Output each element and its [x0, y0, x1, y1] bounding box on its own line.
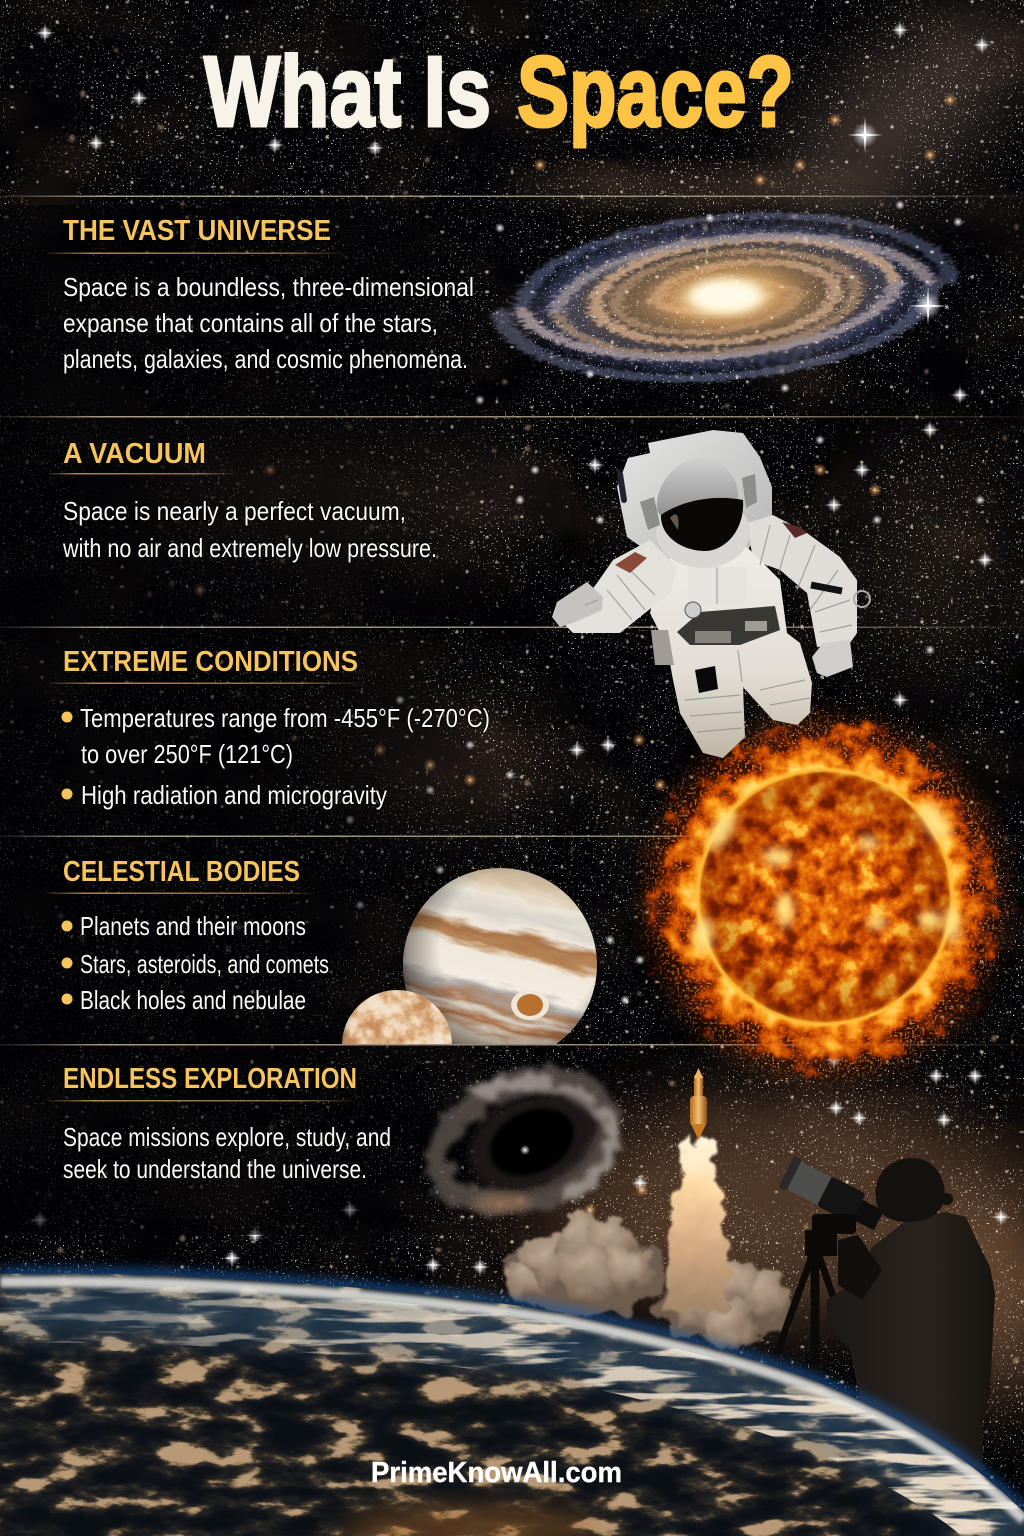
- section: celestial bodies: CELESTIAL BODIES: [63, 856, 300, 888]
- backpack: [617, 430, 772, 560]
- visor: [661, 498, 743, 551]
- helmet dome: [657, 458, 738, 515]
- chest unit: [688, 567, 747, 604]
- section: endless exploration: ENDLESS EXPLORATION: [63, 1063, 357, 1095]
- section: celestial bodies: Black holes and nebulae: [80, 985, 306, 1015]
- rocket: [690, 1068, 707, 1140]
- left arm: [565, 540, 677, 633]
- section: a vacuum: with no air and extremely low pressure.: [62, 533, 437, 563]
- section: a vacuum: [48, 438, 437, 563]
- section: endless exploration: [48, 1063, 391, 1184]
- title: What Is: [204, 36, 491, 148]
- head: [876, 1158, 945, 1222]
- right glove: [812, 640, 853, 677]
- earth: [0, 1265, 1024, 1536]
- sun: [630, 702, 1020, 1092]
- observer silhouette with telescope: [772, 1155, 995, 1470]
- section: a vacuum: A VACUUM: [63, 438, 206, 470]
- suit folds: [585, 525, 852, 732]
- section: celestial bodies: Stars, asteroids, and comets: [80, 949, 329, 979]
- right arm: [747, 515, 857, 647]
- left glove: [552, 582, 603, 627]
- title: [204, 36, 794, 148]
- section: endless exploration: Space missions explore, study, and: [63, 1122, 391, 1152]
- section: a vacuum: Space is nearly a perfect vacuum,: [63, 496, 406, 526]
- section: extreme conditions: High radiation and microgravity: [81, 780, 387, 810]
- section: the vast universe: THE VAST UNIVERSE: [63, 215, 331, 247]
- chest controls: [677, 602, 780, 645]
- bright stars: [30, 20, 1011, 1277]
- section: celestial bodies: Planets and their moons: [80, 911, 306, 941]
- section: the vast universe: planets, galaxies, and cosmic phenomena.: [63, 344, 468, 374]
- black hole: [419, 1057, 625, 1227]
- black pouch: [695, 666, 718, 693]
- jupiter and moon: [342, 868, 597, 1044]
- section: the vast universe: Space is a boundless, three-dimensional: [63, 272, 474, 302]
- section: extreme conditions: EXTREME CONDITIONS: [63, 646, 358, 678]
- moon: [342, 990, 452, 1044]
- jupiter: [403, 868, 597, 1044]
- helmet neck ring: [656, 496, 750, 568]
- website footer: PrimeKnowAll.com: [371, 1457, 622, 1489]
- panel shading behind text column: [0, 205, 500, 1235]
- arm strap: [811, 585, 842, 591]
- section: extreme conditions: [50, 646, 490, 810]
- helmet side brackets: [640, 474, 757, 530]
- section: extreme conditions: Temperatures range from -455°F (-270°C): [80, 703, 490, 733]
- section: celestial bodies: [46, 856, 329, 1015]
- title: Space?: [517, 36, 794, 148]
- smoke clouds: [505, 1214, 793, 1351]
- astronaut: [552, 430, 870, 758]
- torso and legs: [650, 547, 812, 758]
- arm: [838, 1235, 882, 1300]
- telescope: [778, 1155, 888, 1235]
- waist clips: [651, 630, 674, 665]
- body and hood: [827, 1212, 995, 1470]
- section divider lines: [0, 196, 1024, 1046]
- section: endless exploration: seek to understand the universe.: [63, 1154, 367, 1184]
- section: extreme conditions: to over 250°F (121°C): [81, 739, 293, 769]
- shoulder patch: [615, 552, 647, 573]
- section: the vast universe: [48, 215, 474, 374]
- section: the vast universe: expanse that contains all of the stars,: [63, 308, 438, 338]
- rocket plume: [666, 1132, 730, 1310]
- tripod: [772, 1230, 862, 1390]
- galaxy: spiral illustration: [496, 198, 956, 396]
